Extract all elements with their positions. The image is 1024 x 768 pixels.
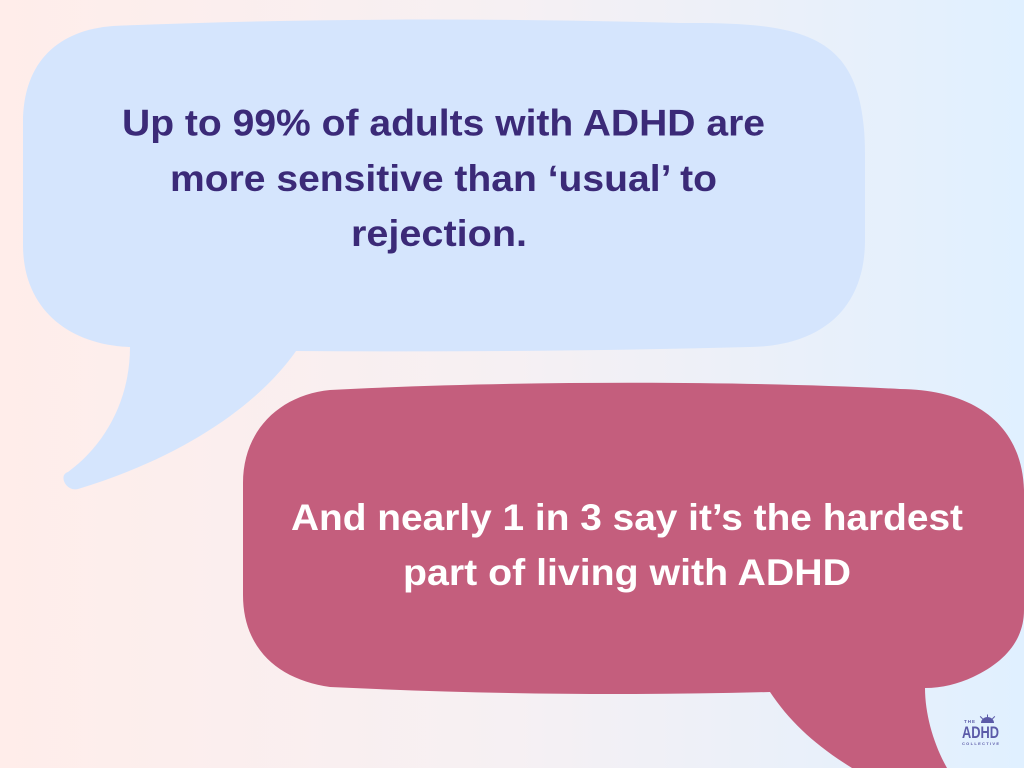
text: rejection statistic: Up to 99% of adults with ADHD are [122,102,765,144]
text: rejection statistic [122,102,765,254]
logo: The ADHD Collective [962,714,999,746]
logo: The ADHD Collective: ADHD [962,723,999,742]
text: hardest part statistic: part of living with ADHD [403,552,851,593]
logo: The ADHD Collective: THE [964,719,975,724]
icon: rising sun [980,714,995,723]
text: rejection statistic: rejection. [351,213,527,254]
logo: The ADHD Collective: COLLECTIVE [962,741,999,746]
text: hardest part statistic [291,497,963,593]
panel: blue speech bubble [23,20,865,489]
text: rejection statistic: more sensitive than ‘usual’ to [170,158,717,199]
panel: rose speech bubble [243,383,1024,768]
text: hardest part statistic: And nearly 1 in 3 say it’s the hardest [291,497,963,538]
